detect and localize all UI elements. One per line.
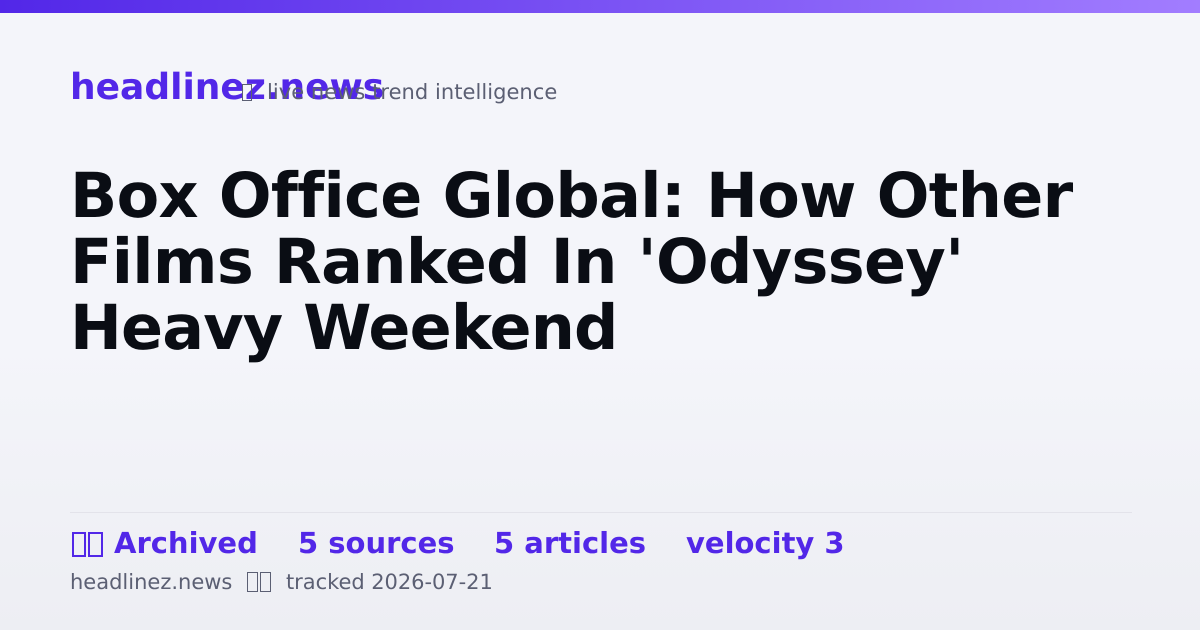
divider	[70, 512, 1132, 513]
stats row	[72, 526, 845, 560]
footer line	[70, 570, 493, 594]
source name: headlinez.news	[70, 570, 232, 594]
title: Films Ranked In 'Odyssey'	[70, 225, 964, 298]
brand name: headlinez.news	[70, 67, 384, 108]
articles count: 5 articles	[494, 526, 646, 560]
icon: missing glyph box	[242, 84, 252, 101]
tagline text: live news trend intelligence	[267, 80, 557, 104]
top gradient bar	[0, 0, 1200, 13]
velocity: velocity 3	[686, 526, 845, 560]
title	[70, 159, 1074, 364]
tracked date: tracked 2026-07-21	[286, 570, 493, 594]
sources count: 5 sources	[298, 526, 455, 560]
icon: missing glyph boxes	[247, 572, 271, 592]
status: archived: Archived	[114, 526, 258, 560]
title: Box Office Global: How Other	[70, 159, 1073, 232]
title: Heavy Weekend	[70, 291, 618, 364]
icon: missing glyph boxes	[72, 532, 103, 557]
tagline	[242, 80, 557, 104]
